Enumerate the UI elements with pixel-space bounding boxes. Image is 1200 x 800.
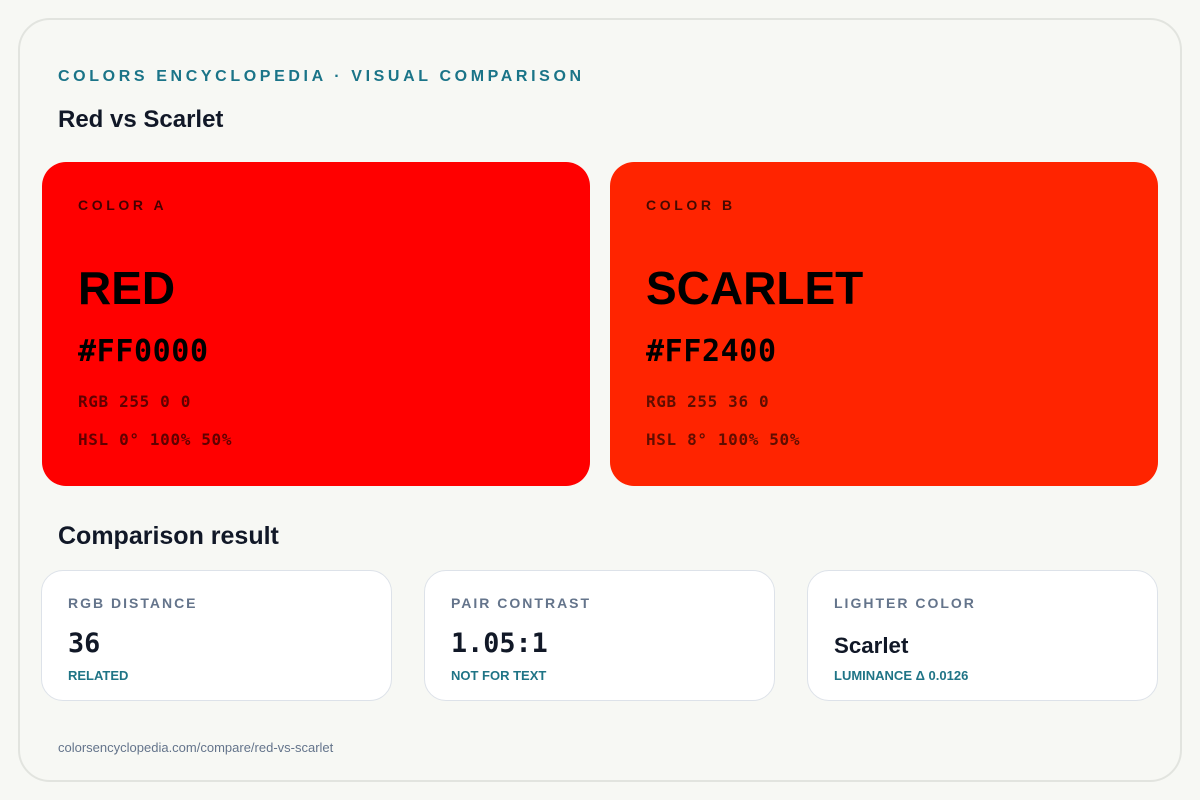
color A name: RED (78, 262, 175, 314)
color A RGB: RGB 255 0 0 (78, 392, 191, 411)
color B name: SCARLET (646, 262, 863, 314)
color B RGB: RGB 255 36 0 (646, 392, 769, 411)
color B HSL: HSL 8° 100% 50% (646, 430, 800, 449)
stat note: RELATED (68, 668, 128, 683)
color A hex: #FF0000 (78, 334, 209, 369)
color B hex: #FF2400 (646, 334, 777, 369)
color A HSL: HSL 0° 100% 50% (78, 430, 232, 449)
stat label: LIGHTER COLOR (834, 595, 976, 611)
stat label: RGB DISTANCE (68, 595, 198, 611)
stat note: NOT FOR TEXT (451, 668, 546, 683)
panel: RGB distance (41, 570, 392, 701)
color B label: COLOR B (646, 197, 736, 213)
panel: color A swatch (42, 162, 590, 486)
eyebrow heading: COLORS ENCYCLOPEDIA · VISUAL COMPARISON (58, 68, 585, 85)
stat note: LUMINANCE Δ 0.0126 (834, 668, 968, 683)
panel: pair contrast (424, 570, 775, 701)
stat label: PAIR CONTRAST (451, 595, 591, 611)
footer url: colorsencyclopedia.com/compare/red-vs-scarlet (58, 740, 333, 755)
stat value: Scarlet (834, 633, 908, 658)
color A label: COLOR A (78, 197, 167, 213)
title: Red vs Scarlet (58, 106, 223, 133)
stat value: 36 (68, 628, 100, 659)
stat value: 1.05:1 (451, 628, 548, 659)
panel: lighter color (807, 570, 1158, 701)
section heading: comparison result: Comparison result (58, 522, 279, 550)
panel: color B swatch (610, 162, 1158, 486)
